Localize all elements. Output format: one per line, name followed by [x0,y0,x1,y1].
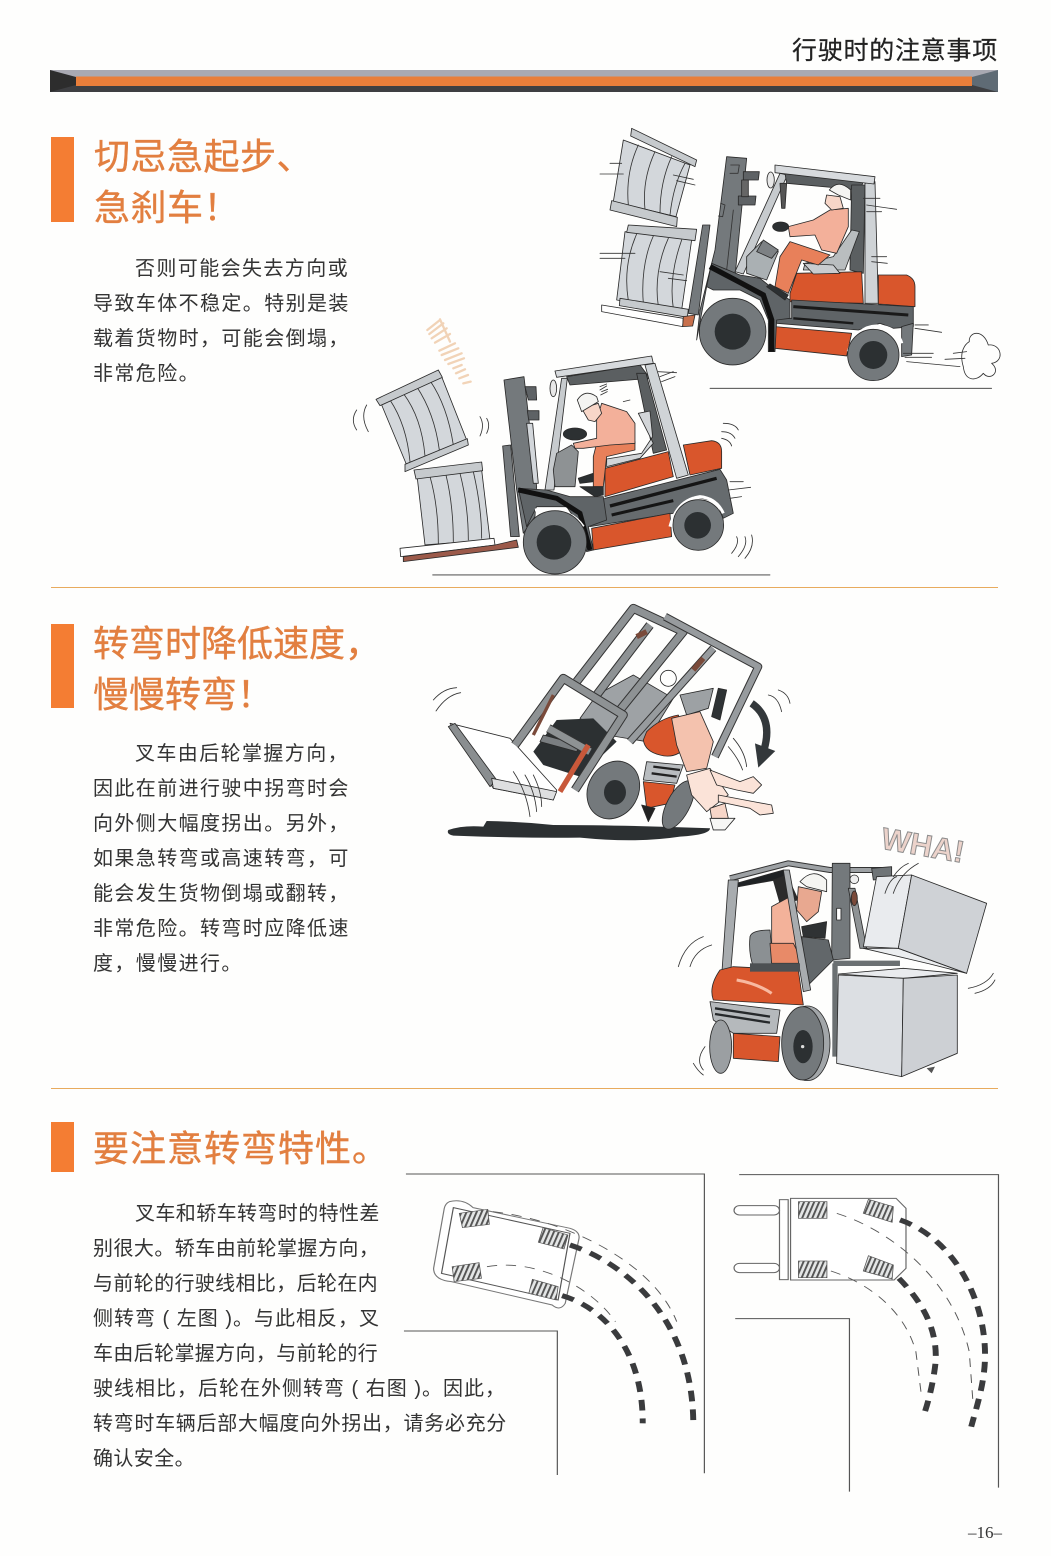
falling driver [672,688,773,830]
section 3 body text: 确认安全。 [93,1448,195,1470]
section 1 heading [94,136,313,228]
fork plate [448,723,557,800]
section 3 heading: 要注意转弯特性。 [93,1128,389,1169]
section 2 body text: 因此在前进行驶中拐弯时会 [93,778,350,800]
page number: –16– [968,1523,1002,1542]
section 2 body text: 能会发生货物倒塌或翻转， [93,883,350,905]
driver [553,384,653,497]
front mast [515,678,623,792]
section 3 body text: 别很大。轿车由前轮掌握方向， [93,1238,379,1260]
forklift overturning [433,608,790,840]
road edges [404,1174,704,1475]
section 3 body text: 与前轮的行驶线相比，后轮在内 [93,1273,378,1295]
section 1 body text: 非常危险。 [93,363,200,385]
section 3 body text: 车由后轮掌握方向，与前轮的行 [93,1343,378,1365]
section 1 body text [93,258,350,385]
bold rear wheel tracks [562,1245,693,1423]
section 2 heading: 转弯时降低速度， [93,623,381,664]
section 2 body text: 非常危险。转弯时应降低速 [93,918,350,940]
mast [503,377,539,537]
turning diagram: car [404,1174,704,1475]
section 1 accent bar [51,137,74,222]
exhaust puff and speed lines [903,325,1000,379]
motion lines [678,863,995,1075]
rotation arrow [752,703,775,768]
forklift accelerating [600,128,1000,388]
section 1 body text: 否则可能会失去方向或 [135,258,349,280]
section 2 accent bar [51,624,74,708]
road edges [735,1175,998,1492]
upper crate [863,875,987,973]
section 3 accent bar [51,1122,74,1172]
forklift body [734,1198,906,1280]
ground line [433,574,770,576]
section 2 body text: 向外侧大幅度拐出。另外， [93,813,350,835]
ground line [710,387,992,390]
thin wheel tracks [487,1212,677,1322]
lower crate [833,963,957,1077]
driver [747,184,859,300]
overhead guard [735,165,897,303]
car body [434,1201,579,1308]
section 3 body text: 侧转弯 ( 左图 )。与此相反，叉 [93,1308,380,1330]
bold rear wheel tracks [899,1220,985,1427]
motion lines [722,423,752,558]
forklift cornering with falling load [678,822,995,1081]
falling load [353,370,518,562]
forklift wheels [798,1199,893,1279]
divider 1 [51,587,998,588]
section 3 body text: 叉车和轿车转弯时的特性差 [135,1203,380,1225]
section 3 body text: 转弯时车辆后部大幅度向外拐出，请务必充分 [93,1413,507,1435]
motion lines [433,688,790,817]
wheels [523,500,724,574]
wheels [699,298,899,381]
section 2 heading [93,623,381,715]
page title: 行驶时的注意事项 [792,37,998,65]
turning diagram: forklift [734,1175,998,1492]
body [518,441,733,552]
overhead guard [720,863,892,1000]
header bar [50,70,998,92]
section 2 heading: 慢慢转弯！ [93,674,273,715]
section 2 body text: 度，慢慢进行。 [93,953,243,975]
section 2 body text: 如果急转弯或高速转弯，可 [93,848,350,870]
body [710,963,803,1062]
section 1 body text: 载着货物时，可能会倒塌， [93,328,350,350]
thin wheel tracks [831,1213,973,1405]
section 1 heading: 切忌急起步、 [94,136,313,177]
body [642,715,690,822]
mast [688,157,759,340]
stacked load [600,128,697,327]
driver [750,870,833,992]
section 2 body text [93,743,350,975]
car wheels [452,1209,568,1300]
section 1 body text: 导致车体不稳定。特别是装 [93,293,350,315]
section 1 heading: 急刹车！ [94,187,240,228]
section 3 body text [93,1202,507,1470]
WHA sound effect: WHA! [879,822,967,870]
sound effect smudge [427,319,471,383]
wheels [577,752,701,834]
section 3 body text: 驶线相比，后轮在外侧转弯 ( 右图 )。因此， [93,1378,506,1400]
mast [832,863,867,960]
rear frame [577,608,758,757]
overhead guard [545,356,688,490]
chassis interior [533,670,676,777]
forklift braking [353,319,770,575]
shadow [448,821,710,840]
section 2 body text: 叉车由后轮掌握方向， [135,743,349,765]
wheels [710,1006,830,1081]
counterweight body [707,263,915,357]
divider 2 [51,1088,998,1089]
